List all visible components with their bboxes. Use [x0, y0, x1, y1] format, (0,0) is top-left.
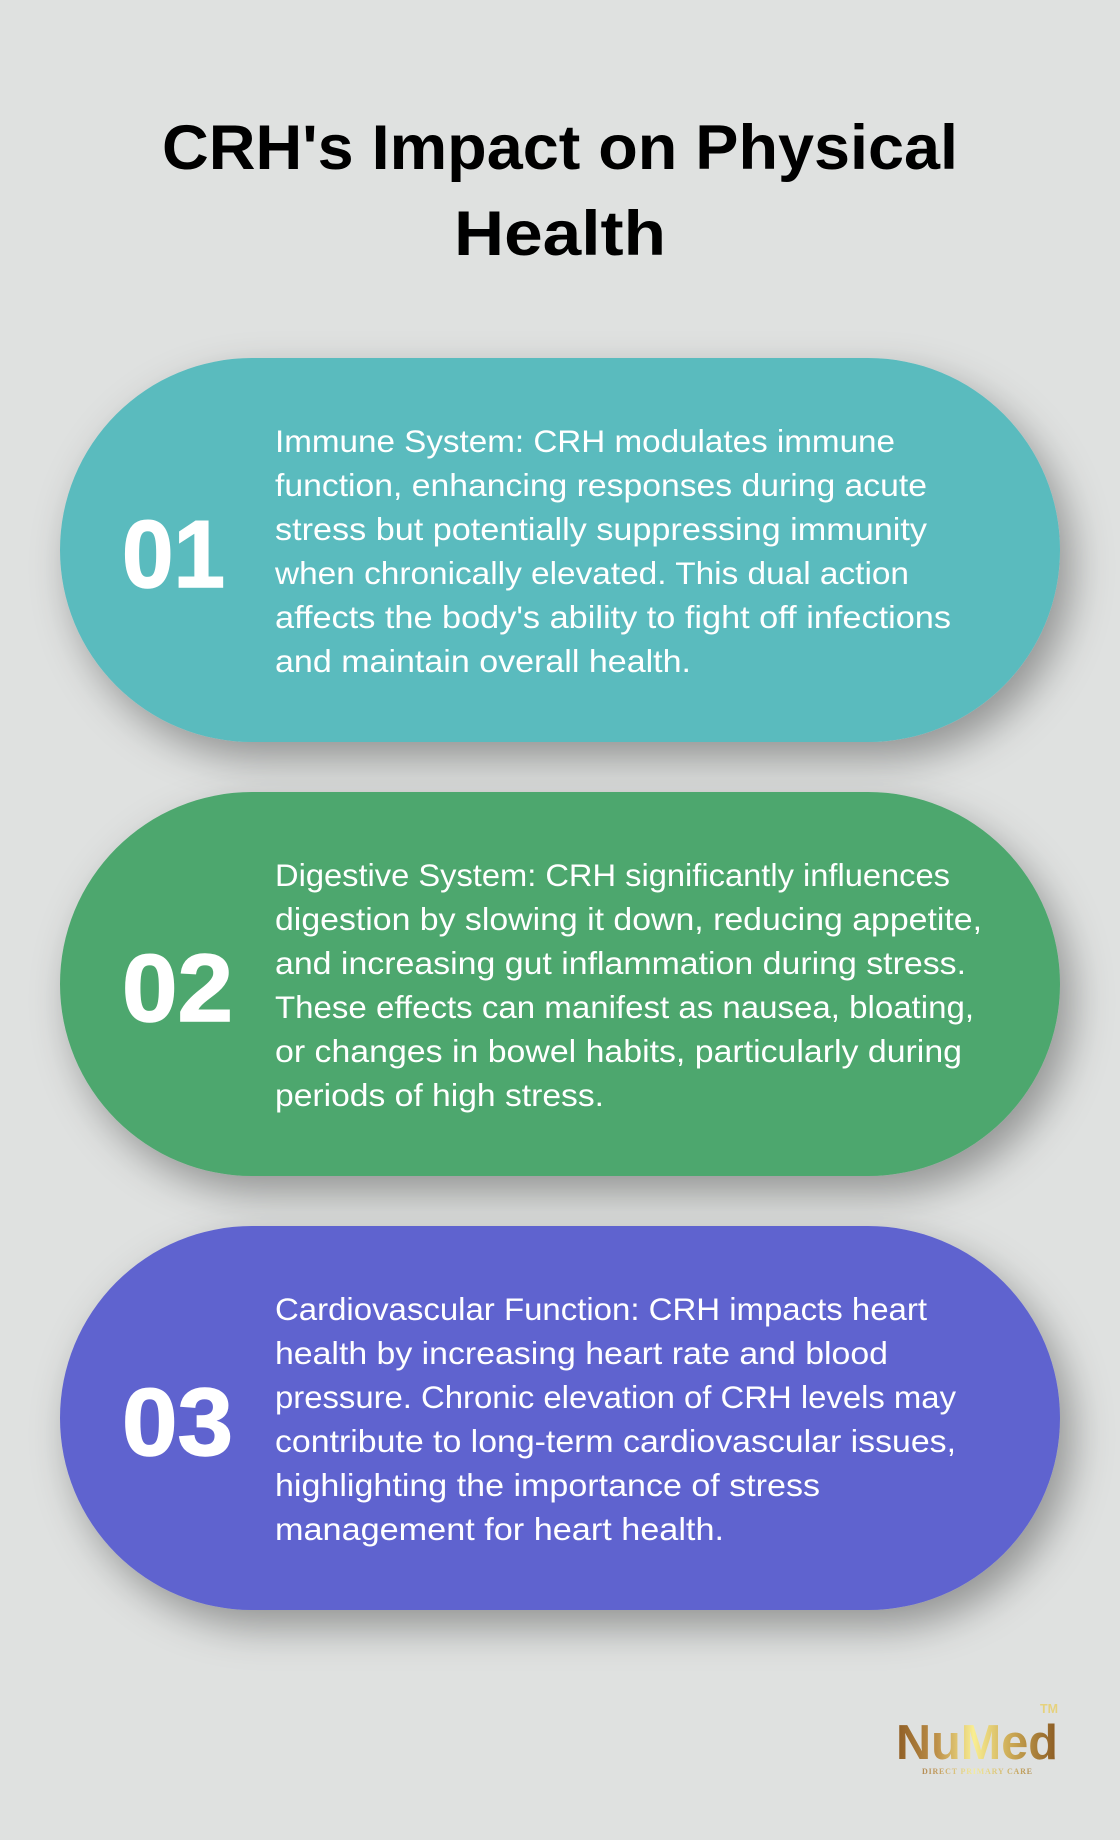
text: cardiovascular function description: Cardiovascular Function: CRH impacts heart: [275, 1291, 927, 1327]
title: CRH's Impact on Physical: [162, 113, 958, 183]
logo: NuMed: DIRECT PRIMARY CARE: [922, 1767, 1032, 1776]
text: immune system description: and maintain overall health.: [275, 643, 691, 679]
pill background: teal: [60, 358, 1060, 742]
text: digestive system description: Digestive System: CRH significantly influences: [275, 857, 950, 893]
logo: NuMed: NuMed: [896, 1716, 1058, 1770]
panel: cardiovascular function: [60, 1226, 1060, 1610]
text: immune system description: affects the body's ability to fight off infections: [275, 599, 951, 635]
text: digestive system description: and increasing gut inflammation during stress.: [275, 945, 966, 981]
text: cardiovascular function description: management for heart health.: [275, 1511, 724, 1547]
text: digestive system description: periods of high stress.: [275, 1077, 604, 1113]
title: Health: [454, 199, 666, 269]
text: cardiovascular function description: contribute to long-term cardiovascular issues,: [275, 1423, 956, 1459]
text: immune system description: function, enhancing responses during acute: [275, 467, 927, 503]
title: [162, 113, 958, 269]
text: cardiovascular function description: pressure. Chronic elevation of CRH levels may: [275, 1379, 956, 1415]
number 01: 01: [122, 501, 225, 608]
text: cardiovascular function description: [275, 1291, 956, 1547]
panel: digestive system: [60, 792, 1060, 1176]
text: immune system description: stress but potentially suppressing immunity: [275, 511, 927, 547]
text: immune system description: Immune System: CRH modulates immune: [275, 423, 895, 459]
pill background: purple: [60, 1226, 1060, 1610]
text: digestive system description: These effects can manifest as nausea, bloating,: [275, 989, 974, 1025]
text: immune system description: [274, 423, 951, 679]
number 03: 03: [122, 1369, 233, 1476]
number 02: 02: [122, 935, 233, 1042]
panel: immune system: [60, 358, 1060, 742]
text: digestive system description: digestion by slowing it down, reducing appetite,: [275, 901, 982, 937]
pill background: green: [60, 792, 1060, 1176]
logo: NuMed: TM: [1040, 1702, 1058, 1716]
text: immune system description: when chronically elevated. This dual action: [274, 555, 909, 591]
text: digestive system description: [275, 857, 982, 1113]
text: digestive system description: or changes in bowel habits, particularly during: [275, 1033, 962, 1069]
text: cardiovascular function description: highlighting the importance of stress: [275, 1467, 820, 1503]
text: cardiovascular function description: health by increasing heart rate and blood: [275, 1335, 888, 1371]
